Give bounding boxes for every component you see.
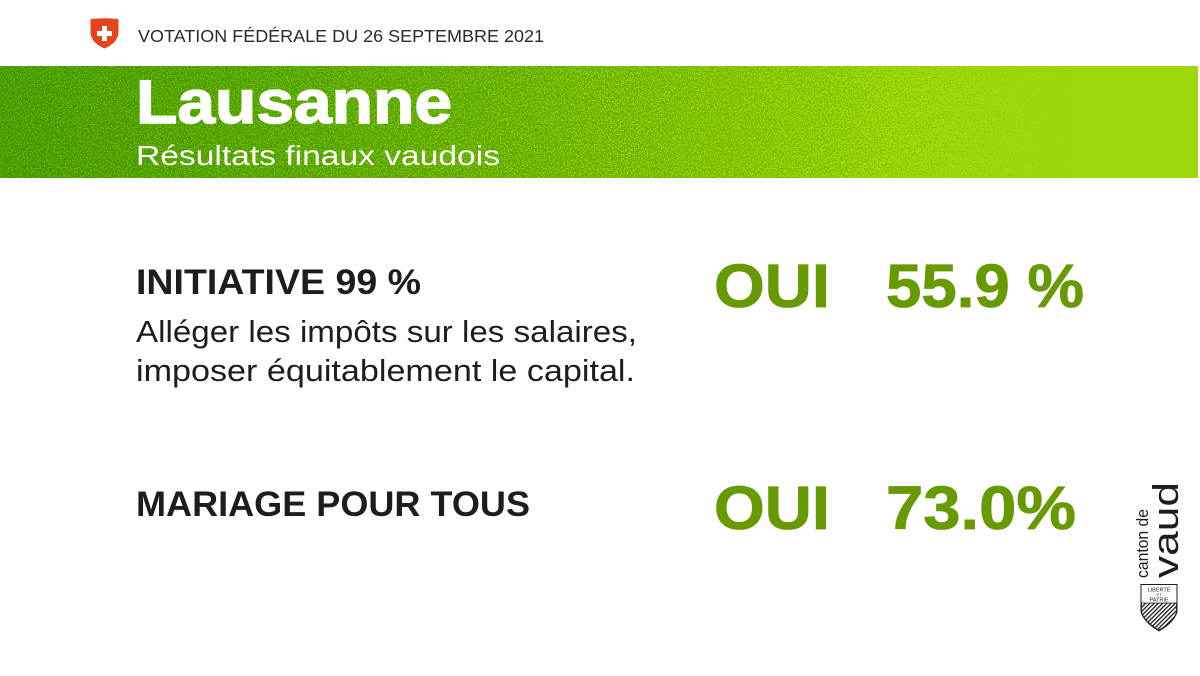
header: vote date: VOTATION FÉDÉRALE DU 26 SEPTEMBRE 2021: [138, 26, 544, 46]
logo shield: [1141, 584, 1177, 631]
logo shield: ET: [1156, 592, 1162, 597]
heading: mariage pour tous: MARIAGE POUR TOUS: [136, 485, 530, 524]
result value: 55.9 %: 55.9 %: [886, 252, 1084, 320]
panel: mariage pour tous: [136, 474, 1076, 542]
icon: Swiss federal shield: [90, 18, 118, 48]
text block: initiative description: imposer équitablement le capital.: [136, 353, 635, 388]
text block: initiative description: Alléger les impôts sur les salaires,: [136, 314, 637, 349]
logo: canton de Vaud: [1133, 482, 1186, 631]
panel: initiative 99 %: [136, 252, 1084, 388]
logo shield: LIBERTÉ: [1148, 586, 1171, 594]
logo text: canton de: canton de: [1133, 509, 1152, 578]
result value: 73.0%: 73.0%: [886, 474, 1076, 542]
logo shield: PATRIE: [1149, 598, 1169, 604]
heading: initiative 99 %: INITIATIVE 99 %: [136, 263, 421, 302]
logo text: vaud: vaud: [1145, 482, 1186, 578]
banner subtitle: Résultats finaux vaudois: [136, 140, 500, 171]
banner title: Lausanne: [136, 68, 452, 136]
result label: OUI: OUI: [714, 474, 830, 542]
text block: initiative description: [136, 314, 637, 388]
banner: green grain gradient: [0, 66, 1198, 178]
result label: OUI: OUI: [714, 252, 830, 320]
